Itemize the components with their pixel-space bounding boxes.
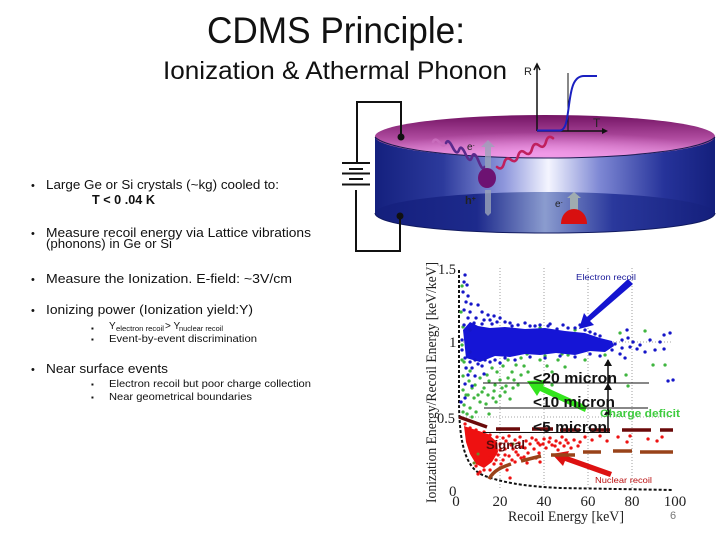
- bullet: near surface: •: [31, 364, 35, 376]
- blue band blob: [463, 322, 614, 362]
- label e-: -: [473, 143, 475, 149]
- depth arrows: [604, 359, 612, 432]
- signal red blob: [464, 426, 498, 468]
- phonon wave: [433, 137, 553, 169]
- bullet: near surface: Electron recoil but poor charge collection: [109, 378, 311, 390]
- bullet: near surface: Near geometrical boundaries: [109, 391, 252, 403]
- y ticks: 0.5: [437, 411, 455, 427]
- bullet: crystals: T < 0 .04 K: [92, 193, 155, 207]
- bullet: ionizing power: •: [31, 305, 35, 317]
- bullet: ionizing power: [31, 303, 257, 345]
- x ticks: 100: [664, 494, 686, 510]
- blue electron recoil arrow: [579, 279, 633, 329]
- label T: T: [593, 116, 601, 130]
- bullet list: [31, 178, 311, 403]
- bullet: crystals: Large Ge or Si crystals (~kg) cooled to:: [46, 178, 279, 192]
- y ticks: 0: [449, 484, 456, 500]
- battery and wires: [342, 102, 404, 251]
- bullet: crystals: [31, 178, 279, 207]
- blue points: [461, 275, 673, 402]
- bullet: recoil energy: (phonons) in Ge or Si: [46, 237, 172, 251]
- label electron recoil: Electron recoil: [576, 272, 636, 282]
- label h+: h: [465, 195, 472, 207]
- green charge deficit arrow: [527, 380, 587, 412]
- y ticks: 1.5: [438, 262, 456, 278]
- bullet: ionizing power: > Y: [165, 321, 180, 332]
- x ticks: 80: [624, 494, 640, 510]
- x ticks: 40: [536, 494, 552, 510]
- y ticks: [437, 262, 456, 500]
- bullet: ionization: •: [31, 274, 35, 286]
- subtitle: Ionization & Athermal Phonon: [163, 57, 507, 85]
- bullet: near surface: ▪: [91, 380, 94, 389]
- electron arrow lower: [567, 192, 581, 212]
- label 5 micron: <5 micron: [533, 419, 607, 436]
- label charge deficit: Charge deficit: [600, 408, 680, 420]
- label signal: Signal: [486, 438, 525, 452]
- page number: 6: [670, 510, 676, 522]
- grid: [460, 268, 673, 490]
- bullet: near surface: [31, 362, 311, 403]
- label 20 micron: <20 micron: [533, 370, 617, 387]
- recoil ball: [478, 168, 496, 188]
- bullet: near surface: ▪: [91, 393, 94, 402]
- red points: [465, 424, 662, 478]
- detector cylinder: [375, 115, 715, 233]
- bullet: ionizing power: Ionizing power (Ionization yield:Y): [46, 303, 253, 317]
- bullet: ionizing power: ▪: [91, 335, 94, 344]
- charge arrows and recoil: [465, 140, 587, 224]
- red dome sensor: [561, 209, 587, 224]
- label e- lower: e: [555, 199, 561, 210]
- dark red dashed line: [459, 417, 673, 430]
- y ticks: 1: [449, 335, 456, 351]
- x ticks: [452, 494, 686, 510]
- bullet: ionizing power: electron recoil: [116, 326, 164, 333]
- y axis title: Ionization Energy/Recoil Energy [keV/keV]: [424, 262, 440, 503]
- R vs T transition graph: [534, 64, 608, 134]
- scatter chart: [424, 262, 686, 525]
- bullet: ionizing power: Event-by-event discrimination: [109, 333, 257, 345]
- label R: R: [524, 66, 532, 78]
- bullet: ionizing power: nuclear recoil: [179, 326, 223, 333]
- hole arrow down: [485, 190, 491, 216]
- bullet: crystals: •: [31, 180, 35, 192]
- bullet: near surface: Near surface events: [46, 362, 168, 376]
- label e- lower: -: [561, 200, 563, 206]
- bullet: ionizing power: ▪: [91, 324, 94, 333]
- boundary dashed curve: [459, 270, 673, 490]
- bullet: ionizing power: Y: [109, 321, 116, 332]
- brown dashed curve: [489, 451, 673, 479]
- micron lines: [483, 383, 649, 432]
- label 10 micron: <10 micron: [533, 394, 615, 411]
- x ticks: 20: [492, 494, 508, 510]
- label e-: e: [467, 142, 473, 153]
- label h+: +: [472, 196, 476, 203]
- bullet: recoil energy: [31, 226, 311, 251]
- bullet: recoil energy: Measure recoil energy via Lattice vibrations: [46, 226, 311, 240]
- few green in red: [474, 444, 513, 463]
- electron arrow up: [481, 140, 495, 168]
- bullet: recoil energy: •: [31, 228, 35, 240]
- x axis title: Recoil Energy [keV]: [508, 509, 624, 525]
- red nuclear recoil arrow: [552, 451, 612, 477]
- x ticks: 0: [452, 494, 460, 510]
- bullet: ionization: Measure the Ionization. E-field: ~3V/cm: [46, 272, 292, 286]
- title: CDMS Principle:: [207, 10, 465, 51]
- x ticks: 60: [580, 494, 596, 510]
- green points: [461, 286, 665, 417]
- label nuclear recoil: Nuclear recoil: [595, 475, 652, 485]
